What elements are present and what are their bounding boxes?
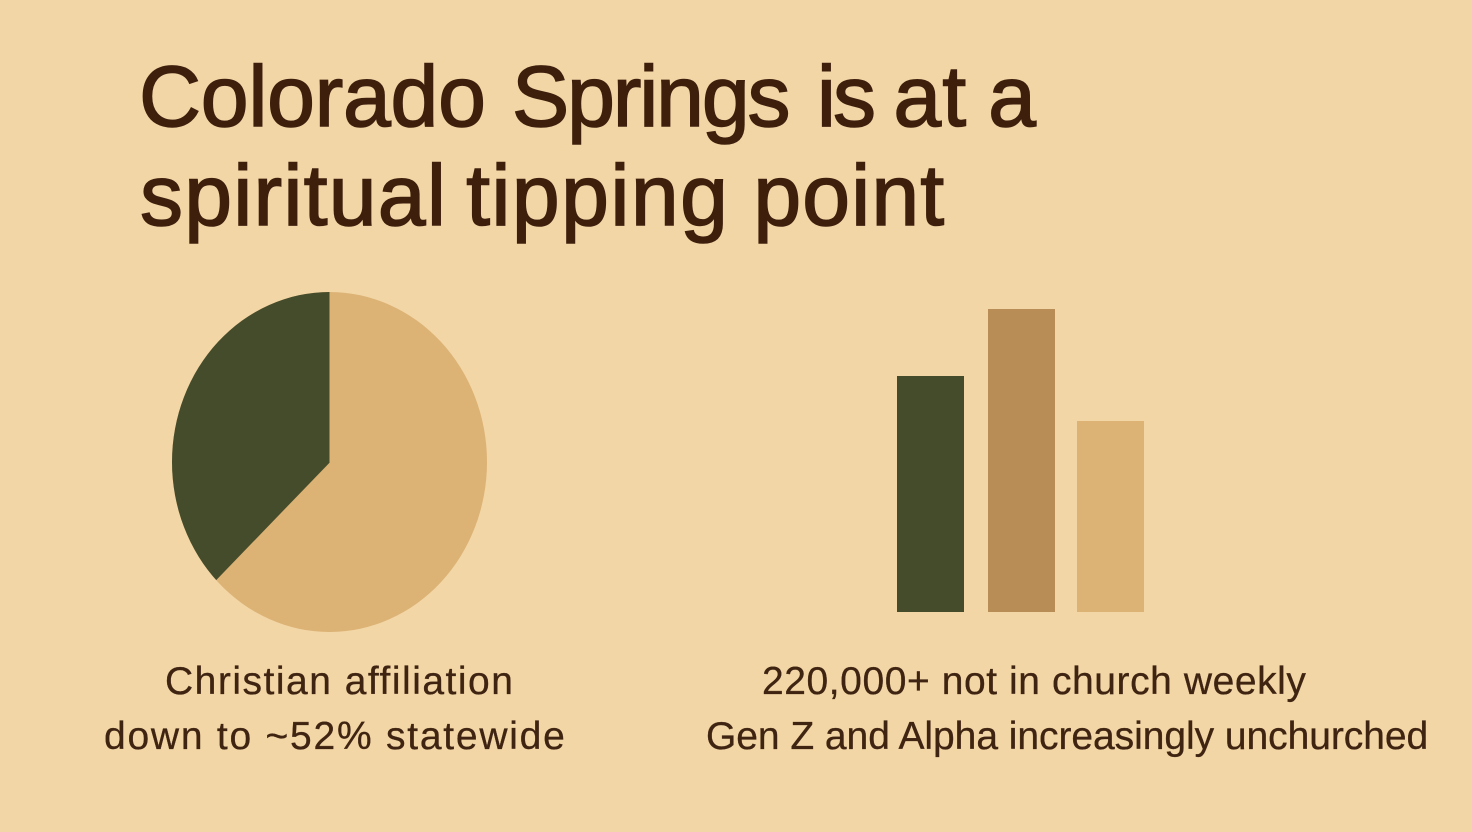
pie caption: down to ~52% statewide (104, 715, 567, 758)
bar caption: Gen Z and Alpha increasingly unchurched (706, 715, 1428, 758)
bar caption: 220,000+ not in church weekly (762, 660, 1306, 703)
bar caption (706, 660, 1428, 758)
title: Colorado Springs is at a (139, 49, 1035, 145)
pie caption: Christian affiliation (165, 660, 514, 703)
pie caption (104, 660, 567, 758)
title (139, 49, 1037, 244)
pie chart: Christian affiliation (172, 292, 487, 632)
title: spiritual tipping point (140, 148, 945, 244)
bar chart (897, 309, 1144, 612)
